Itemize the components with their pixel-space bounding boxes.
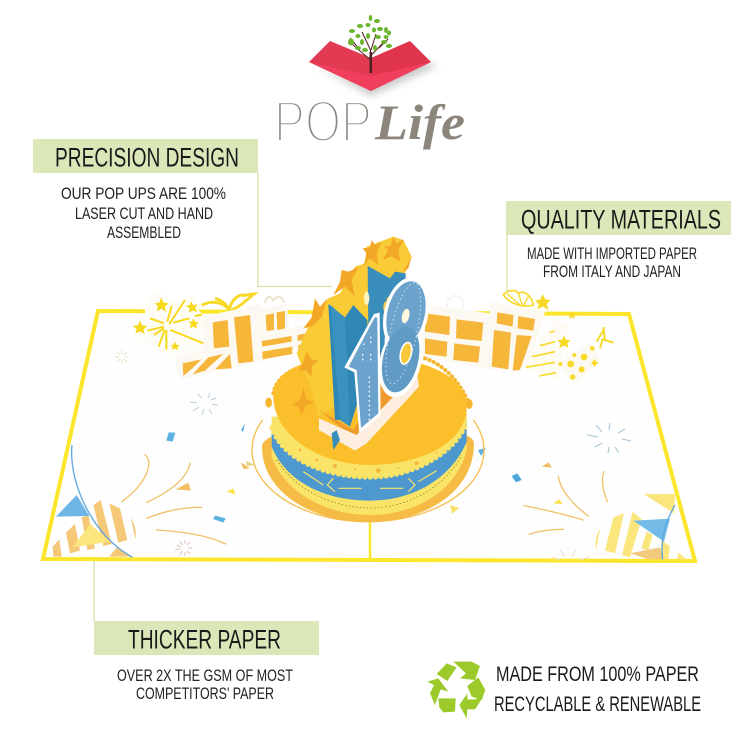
- cake body bottom band: [272, 417, 467, 515]
- number 1: [344, 313, 381, 434]
- number 8: [372, 273, 436, 402]
- plate ring: [252, 420, 484, 522]
- text: thicker paper description: [117, 667, 293, 703]
- text: recyclable claim: [494, 663, 701, 716]
- left gifts pop-up: [173, 294, 310, 380]
- confetti near center: [241, 423, 486, 514]
- firework: bottom right: [551, 549, 589, 560]
- text: thicker paper description: OVER 2X THE GSM OF MOST: [117, 667, 293, 685]
- panel: quality materials: [506, 201, 731, 281]
- gift bow: [202, 294, 254, 310]
- left party popper: [53, 432, 250, 557]
- logo wordmark Life: Life: [374, 94, 465, 150]
- cake pop-up: [252, 237, 484, 522]
- text: quality materials description: [527, 245, 697, 281]
- text: precision design description: [61, 185, 226, 242]
- plate: [262, 424, 474, 522]
- party hat left: [525, 320, 571, 380]
- back rim scallops: [273, 358, 467, 400]
- scallop edge and chevrons: [272, 423, 467, 492]
- connector lines: [94, 173, 507, 621]
- icon: recycle: [427, 662, 485, 718]
- blue panels: [328, 266, 406, 427]
- firework: left small: [115, 350, 129, 364]
- text: quality materials description: FROM ITALY AND JAPAN: [543, 263, 681, 281]
- panel: thicker paper: THICKER PAPER: [128, 624, 281, 654]
- firework: bottom left: [175, 540, 192, 556]
- firework: right blue: [587, 423, 631, 453]
- text: thicker paper description: COMPETITORS' PAPER: [136, 685, 274, 703]
- panel: thicker paper: [94, 621, 319, 703]
- text: precision design description: OUR POP UPS ARE 100%: [61, 185, 226, 203]
- scallop band: [272, 410, 467, 477]
- firework: left blue: [190, 393, 218, 415]
- card: open pop-up base: [43, 311, 695, 561]
- stars backing: [297, 237, 412, 417]
- panel: precision design: PRECISION DESIGN: [55, 142, 239, 172]
- party hat right: [558, 327, 613, 384]
- logo: Pop Life: [274, 15, 465, 154]
- text: precision design description: ASSEMBLED: [107, 224, 181, 242]
- panel: precision design: [33, 139, 258, 242]
- icon: tree: [348, 15, 392, 73]
- left firework pop-up: [132, 289, 210, 355]
- base box: [319, 357, 417, 440]
- right gifts pop-up: [422, 291, 613, 384]
- logo wordmark POP: POP: [274, 90, 372, 154]
- text: precision design description: LASER CUT AND HAND: [75, 205, 213, 223]
- cake blue band: [272, 413, 467, 501]
- right party popper: [512, 462, 687, 559]
- cake top: [273, 357, 467, 465]
